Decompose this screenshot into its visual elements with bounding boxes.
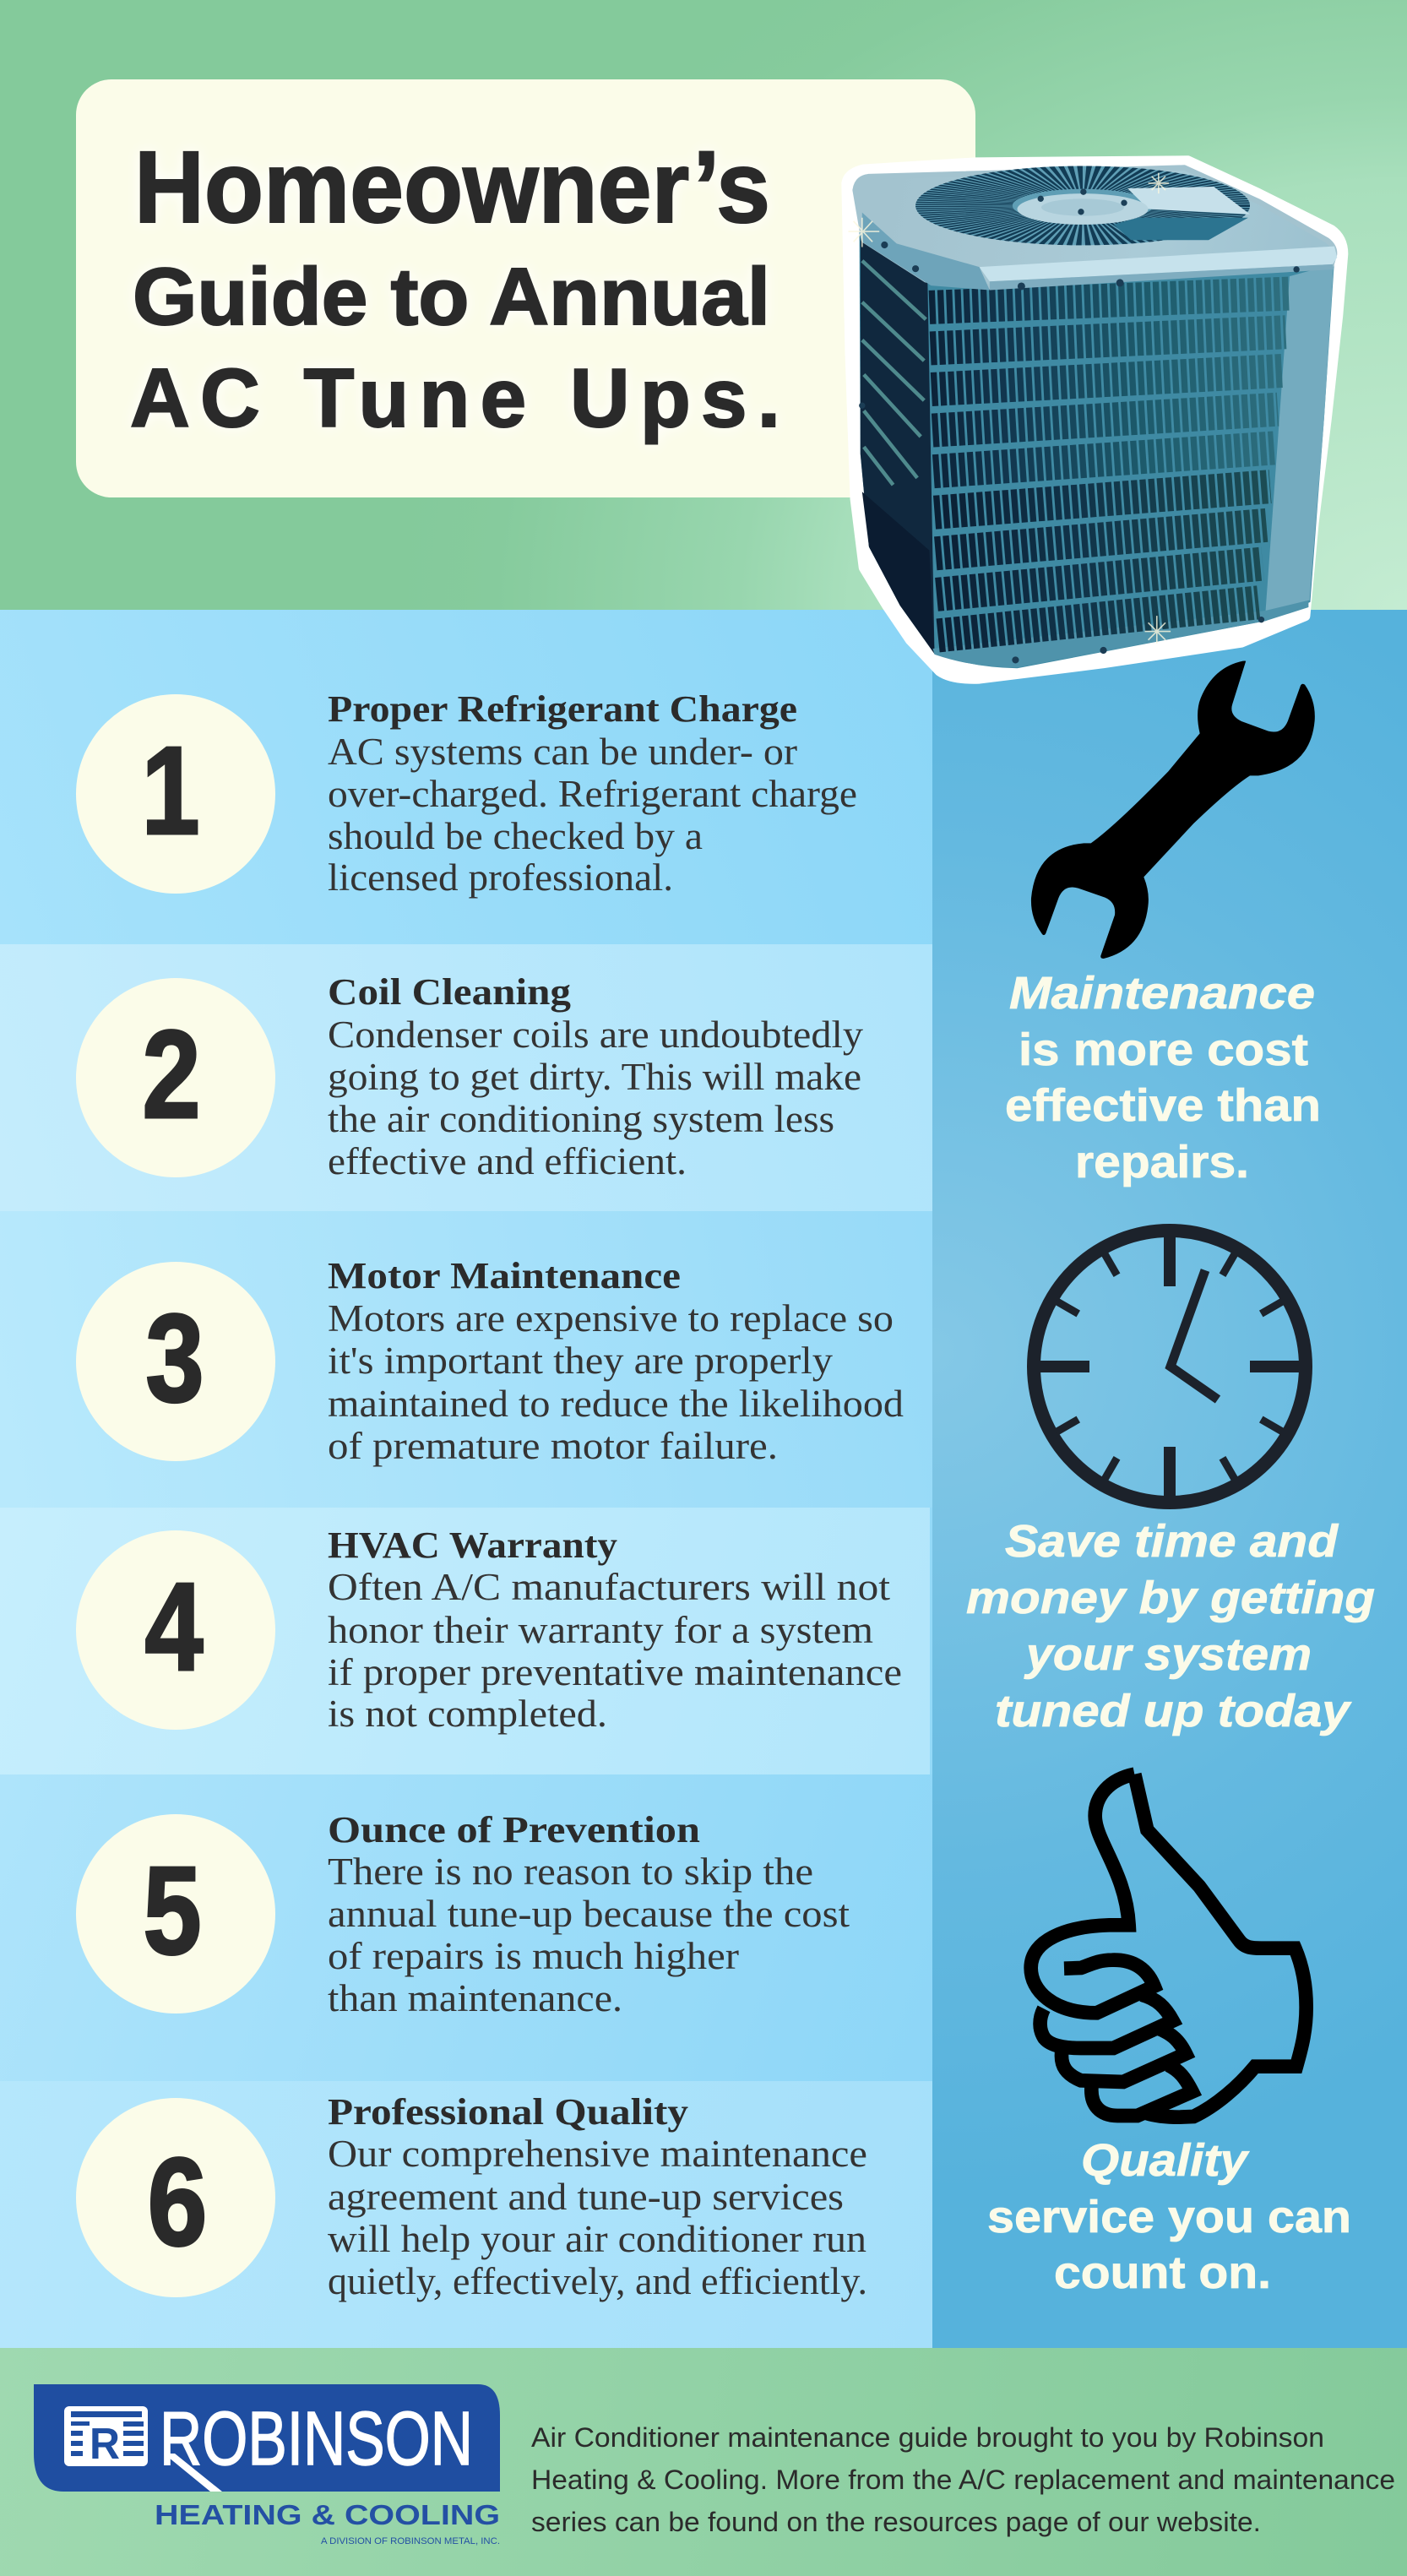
logo icon: R grille [64, 2406, 148, 2469]
panel: title card [76, 79, 975, 497]
panel: step 1 [0, 610, 932, 944]
number badge 1: 1 [141, 720, 200, 860]
number badge 6 [76, 2098, 275, 2297]
logo R leg [164, 2454, 222, 2492]
step text: maintained to reduce the likelihood [328, 1383, 904, 1425]
step text: is not completed. [328, 1693, 607, 1735]
number badge 4: 4 [144, 1557, 204, 1696]
screws [859, 242, 1300, 664]
step text [328, 1850, 850, 2019]
sparkles [848, 173, 1171, 644]
logo icon: R grille: R [90, 2420, 120, 2469]
footer text: Heating & Cooling. More from the A/C replacement and maintenance [531, 2465, 1395, 2495]
callout: quality [987, 2135, 1351, 2298]
step text: Often A/C manufacturers will not [328, 1566, 891, 1608]
number badge 1 [76, 694, 275, 894]
step text [328, 1566, 902, 1735]
callout: maintenance: is more cost [1019, 1024, 1308, 1075]
number badge 5 [76, 1814, 275, 2014]
step text: of premature motor failure. [328, 1425, 778, 1467]
callout: maintenance [1005, 968, 1321, 1187]
panel: step 4 [0, 1508, 930, 1774]
step text: the air conditioning system less [328, 1098, 834, 1140]
step heading: Coil Cleaning [328, 971, 571, 1013]
step text: Motors are expensive to replace so [328, 1297, 894, 1340]
step text [328, 731, 857, 899]
step text: will help your air conditioner run [328, 2218, 866, 2260]
step text: should be checked by a [328, 815, 703, 857]
callout: quality: service you can [987, 2192, 1351, 2242]
step text: agreement and tune-up services [328, 2176, 844, 2218]
step heading: Motor Maintenance [328, 1255, 681, 1296]
footer text [531, 2422, 1395, 2537]
callout: save time and money: your system [1024, 1629, 1312, 1680]
callout: save time and money: money by getting [966, 1573, 1375, 1623]
number badge 2: 2 [142, 1004, 201, 1144]
number badge 6: 6 [148, 2133, 207, 2272]
panel: step 3 [0, 1211, 932, 1508]
number badge 5: 5 [143, 1840, 202, 1980]
title: Guide to Annual [133, 252, 770, 342]
step text: annual tune-up because the cost [328, 1893, 850, 1935]
step text: if proper preventative maintenance [328, 1651, 902, 1693]
logo: Robinson Heating & Cooling [34, 2384, 500, 2546]
step text: over-charged. Refrigerant charge [328, 773, 857, 815]
icon: clock [1034, 1231, 1306, 1503]
step heading: Ounce of Prevention [328, 1809, 700, 1850]
step text [328, 2133, 867, 2302]
footer text: series can be found on the resources page of our website. [531, 2507, 1261, 2537]
panel: steps column background [0, 610, 932, 2348]
panel: step 6 [0, 2081, 932, 2348]
number badge 4 [76, 1530, 275, 1730]
step heading: Proper Refrigerant Charge [328, 688, 797, 730]
callout: maintenance: effective than [1005, 1080, 1321, 1131]
fan grille [915, 166, 1250, 245]
step text: Condenser coils are undoubtedly [328, 1014, 864, 1056]
step text: licensed professional. [328, 856, 673, 899]
step text: honor their warranty for a system [328, 1609, 873, 1651]
unit body [860, 230, 1334, 668]
callout: quality: Quality [1081, 2135, 1250, 2186]
step text: AC systems can be under- or [328, 731, 797, 773]
title [130, 129, 780, 444]
panel: step 5 [0, 1774, 932, 2081]
white sticker outline [846, 160, 1343, 679]
callout: save time and money: tuned up today [995, 1686, 1352, 1736]
icon: thumbs up [1031, 1774, 1306, 2117]
right side panel [1265, 264, 1334, 613]
step text: it's important they are properly [328, 1340, 834, 1382]
left side panel [861, 235, 935, 654]
callout: maintenance: Maintenance [1009, 968, 1315, 1019]
step text: Our comprehensive maintenance [328, 2133, 867, 2175]
top lid [856, 168, 1337, 290]
step text: There is no reason to skip the [328, 1850, 813, 1893]
number badge 3 [76, 1262, 275, 1461]
number badge 2 [76, 978, 275, 1177]
callout: quality: count on. [1054, 2247, 1271, 2298]
step heading: Professional Quality [328, 2091, 688, 2133]
logo division note: A DIVISION OF ROBINSON METAL, INC. [321, 2536, 500, 2546]
panel: header background [0, 0, 1407, 610]
illustration: air conditioner unit [846, 160, 1343, 679]
step text: effective and efficient. [328, 1140, 687, 1182]
title: AC Tune Ups. [130, 351, 780, 444]
callout: maintenance: repairs. [1075, 1137, 1249, 1187]
panel: footer [0, 2348, 1407, 2576]
logo subline: HEATING & COOLING [155, 2499, 500, 2530]
number badge 3: 3 [145, 1288, 204, 1427]
logo wordmark: ROBINSON [160, 2397, 473, 2481]
step text: than maintenance. [328, 1977, 622, 2019]
front grille louvers [929, 294, 1290, 635]
title: Homeowner’s [134, 129, 770, 244]
footer text: Air Conditioner maintenance guide brought to you by Robinson [531, 2422, 1324, 2453]
lower edge band [932, 601, 1308, 667]
step text: going to get dirty. This will make [328, 1056, 861, 1098]
panel: benefits column [932, 610, 1407, 2348]
step text: quietly, effectively, and efficiently. [328, 2260, 867, 2302]
step text [328, 1014, 864, 1182]
icon: wrench [1031, 660, 1315, 959]
step heading: HVAC Warranty [328, 1524, 617, 1566]
panel: step 2 [0, 944, 932, 1211]
callout: save time and money [966, 1516, 1375, 1736]
callout: save time and money: Save time and [1005, 1516, 1339, 1567]
step text [328, 1297, 904, 1467]
step text: of repairs is much higher [328, 1935, 739, 1977]
